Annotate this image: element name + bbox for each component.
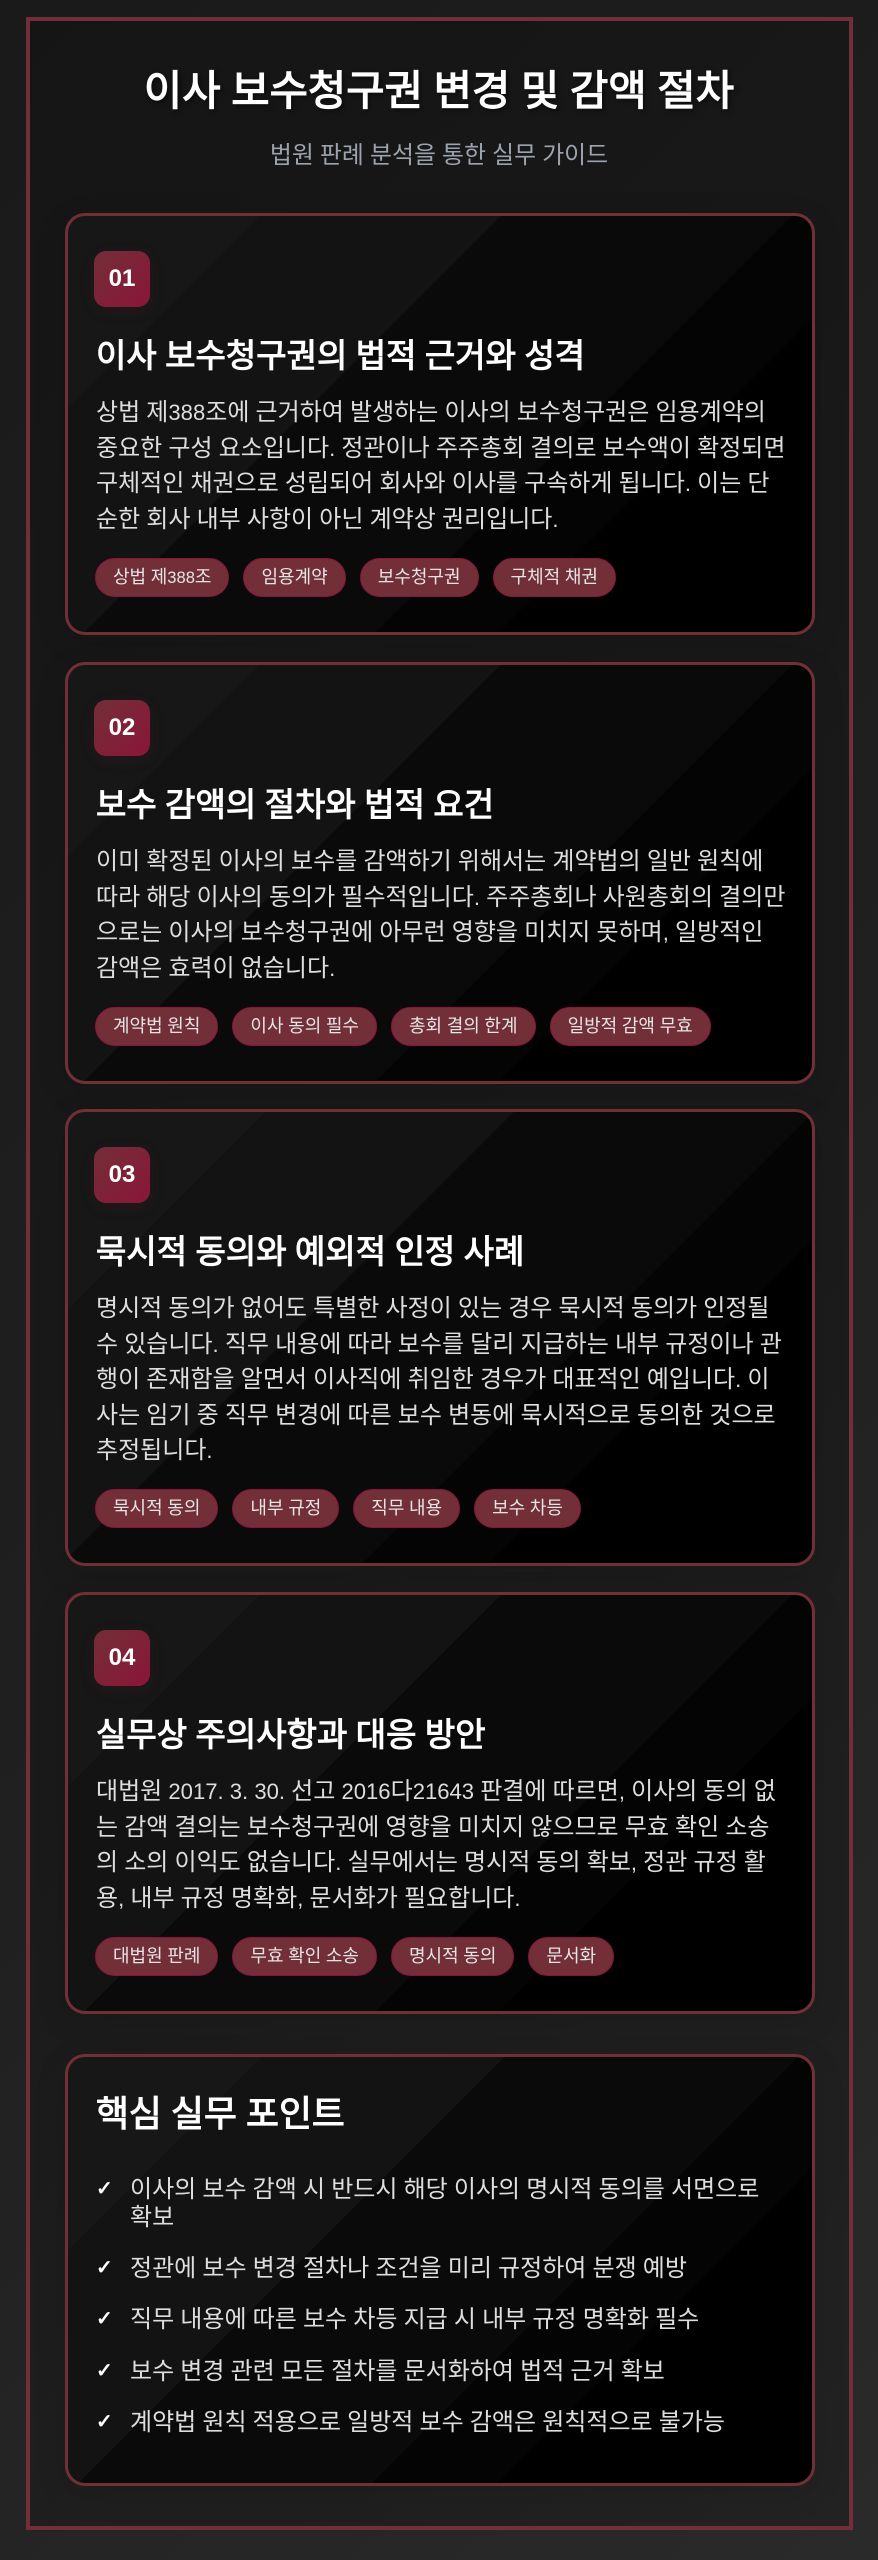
- tags 01: 상법 제388조: [113, 567, 211, 587]
- body text 04: 용, 내부 규정 명확화, 문서화가 필요합니다.: [96, 1884, 520, 1912]
- heading 04: 실무상 주의사항과 대응 방안: [96, 1716, 486, 1753]
- body text 02: 이미 확정된 이사의 보수를 감액하기 위해서는 계약법의 일반 원칙에: [96, 848, 763, 875]
- tags 02: 총회 결의 한계: [409, 1016, 518, 1036]
- body text 01: 상법 제388조에 근거하여 발생하는 이사의 보수청구권은 임용계약의: [96, 399, 766, 426]
- list item 2: ✓: [96, 2257, 113, 2279]
- body text 02: 따라 해당 이사의 동의가 필수적입니다. 주주총회나 사원총회의 결의만: [96, 884, 785, 910]
- tags 03: 직무 내용: [371, 1498, 442, 1518]
- badge 03: 03: [109, 1161, 135, 1188]
- tags 02: [95, 1007, 711, 1046]
- tags 01: 구체적 채권: [511, 567, 598, 587]
- body text 03: 수 있습니다. 직무 내용에 따라 보수를 달리 지급하는 내부 규정이나 관: [96, 1330, 782, 1358]
- body text 01: 순한 회사 내부 사항이 아닌 계약상 권리입니다.: [96, 506, 558, 532]
- body text 03: 명시적 동의가 없어도 특별한 사정이 있는 경우 묵시적 동의가 인정될: [96, 1295, 770, 1322]
- body text 02: [96, 848, 785, 982]
- panel: section 02: [65, 662, 815, 1084]
- tags 02: 이사 동의 필수: [250, 1016, 359, 1036]
- body text 01: 구체적인 채권으로 성립되어 회사와 이사를 구속하게 됩니다. 이는 단: [96, 470, 770, 497]
- tags 03: 보수 차등: [492, 1498, 563, 1518]
- list item 3: ✓: [96, 2308, 113, 2330]
- heading 02: 보수 감액의 절차와 법적 요건: [96, 786, 494, 823]
- body text 02: 감액은 효력이 없습니다.: [96, 954, 335, 982]
- body text 01: 중요한 구성 요소입니다. 정관이나 주주총회 결의로 보수액이 확정되면: [96, 434, 785, 462]
- body text 03: [96, 1295, 782, 1464]
- body text 03: 사는 임기 중 직무 변경에 따른 보수 변동에 묵시적으로 동의한 것으로: [96, 1402, 776, 1428]
- list item 5: 계약법 원칙 적용으로 일방적 보수 감액은 원칙적으로 불가능: [130, 2409, 725, 2436]
- tags 02: 일방적 감액 무효: [568, 1016, 693, 1036]
- tags 02: 계약법 원칙: [113, 1016, 200, 1036]
- list item 2: 정관에 보수 변경 절차나 조건을 미리 규정하여 분쟁 예방: [130, 2255, 687, 2282]
- tags 03: [95, 1489, 581, 1528]
- panel: section 03: [65, 1109, 815, 1566]
- body text 04: [96, 1778, 776, 1912]
- list item 1: 이사의 보수 감액 시 반드시 해당 이사의 명시적 동의를 서면으로: [130, 2176, 759, 2203]
- tags 01: [95, 558, 616, 597]
- body text 04: 의 소의 이익도 없습니다. 실무에서는 명시적 동의 확보, 정관 규정 활: [96, 1849, 766, 1876]
- tags 04: [95, 1937, 614, 1976]
- heading: key points: 핵심 실무 포인트: [96, 2094, 345, 2134]
- body text 03: 추정됩니다.: [96, 1437, 213, 1464]
- list item 1: [96, 2176, 759, 2231]
- badge 04: [94, 1630, 150, 1686]
- badge 04: 04: [109, 1644, 135, 1671]
- tags 04: 문서화: [546, 1946, 596, 1966]
- body text 01: [96, 399, 785, 532]
- tags 03: 내부 규정: [250, 1498, 321, 1518]
- panel: section 04: [65, 1592, 815, 2014]
- badge 01: [94, 251, 150, 307]
- tags 04: 명시적 동의: [409, 1946, 496, 1966]
- tags 03: 묵시적 동의: [113, 1498, 200, 1518]
- list item 4: ✓: [96, 2360, 113, 2382]
- badge 02: [94, 700, 150, 756]
- title: 이사 보수청구권 변경 및 감액 절차: [144, 67, 734, 114]
- body text 04: 는 감액 결의는 보수청구권에 영향을 미치지 않으므로 무효 확인 소송: [96, 1814, 770, 1840]
- tags 04: 무효 확인 소송: [250, 1946, 359, 1966]
- badge 03: [94, 1147, 150, 1203]
- heading 03: 묵시적 동의와 예외적 인정 사례: [96, 1233, 524, 1270]
- list item 3: 직무 내용에 따른 보수 차등 지급 시 내부 규정 명확화 필수: [130, 2306, 699, 2333]
- body text 02: 으로는 이사의 보수청구권에 아무런 영향을 미치지 못하며, 일방적인: [96, 919, 763, 946]
- panel: section 01: [65, 213, 815, 635]
- tags 01: 임용계약: [261, 567, 328, 587]
- body text 03: 행이 존재함을 알면서 이사직에 취임한 경우가 대표적인 예입니다. 이: [96, 1366, 770, 1393]
- body text 04: 대법원 2017. 3. 30. 선고 2016다21643 판결에 따르면, 이사의 동의 없: [96, 1778, 776, 1805]
- list item 5: ✓: [96, 2411, 113, 2433]
- badge 01: 01: [109, 265, 135, 292]
- heading 01: 이사 보수청구권의 법적 근거와 성격: [96, 337, 585, 374]
- subtitle: 법원 판례 분석을 통한 실무 가이드: [270, 142, 608, 169]
- tags 04: 대법원 판례: [113, 1946, 200, 1966]
- badge 02: 02: [109, 714, 135, 741]
- list item 4: 보수 변경 관련 모든 절차를 문서화하여 법적 근거 확보: [130, 2358, 665, 2385]
- panel: key practice points: [65, 2054, 815, 2486]
- tags 01: 보수청구권: [378, 567, 461, 587]
- list item 1: 확보: [130, 2204, 174, 2231]
- list item 1: ✓: [96, 2178, 113, 2200]
